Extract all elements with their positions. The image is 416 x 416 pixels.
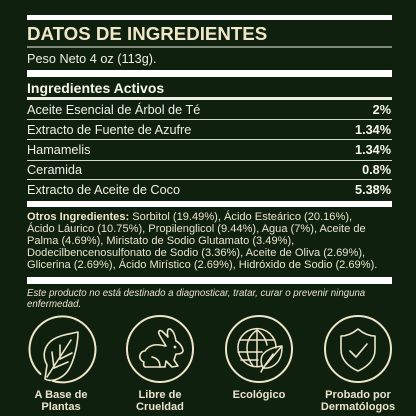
disclaimer: enfermedad. — [27, 299, 81, 310]
label: eco-friendly: Ecológico — [233, 389, 285, 401]
label: cruelty-free — [136, 389, 184, 413]
heading: active ingredients: Ingredientes Activos — [27, 80, 164, 96]
other ingredients — [27, 210, 377, 271]
row: tea tree oil — [27, 102, 391, 117]
label: cruelty-free: Libre de — [139, 389, 181, 401]
label: dermatologist tested: Dermatólogos — [321, 401, 395, 413]
icon: cruelty-free rabbit — [127, 316, 193, 382]
row: coconut oil: Extracto de Aceite de Coco — [27, 183, 180, 197]
label: plant-based: A Base de — [34, 389, 88, 401]
row: coconut oil: 5.38% — [355, 183, 391, 197]
label: plant-based — [34, 389, 88, 413]
other ingredients: Palma (4.69%), Miristato de Sodio Glutamato (3.49%), — [27, 235, 294, 247]
row: ceramide — [27, 163, 391, 177]
other ingredients: Otros Ingredientes: Sorbitol (19.49%), Ácido Esteárico (20.16%), — [27, 211, 352, 223]
row: ceramide: Ceramida — [27, 163, 82, 177]
row: tea tree oil: Aceite Esencial de Árbol de Té — [27, 103, 200, 117]
other ingredients: Dodecilbencenosulfonato de Sodio (3.36%), Aceite de Oliva (2.69%), — [27, 247, 365, 259]
disclaimer — [27, 288, 365, 310]
row: ceramide: 0.8% — [362, 163, 391, 177]
other ingredients: Glicerina (2.69%), Ácido Mirístico (2.69%), Hidróxido de Sodio (2.69%). — [27, 259, 377, 271]
label: dermatologist tested — [321, 389, 395, 413]
net weight: Peso Neto 4 oz (113g). — [27, 52, 157, 66]
row: witch hazel: Hamamelis — [27, 143, 90, 157]
row: tea tree oil: 2% — [373, 103, 391, 117]
icon: eco globe with leaf — [226, 316, 292, 382]
table: active ingredients — [27, 102, 392, 197]
disclaimer: Este producto no está destinado a diagnosticar, tratar, curar o prevenir ninguna — [27, 288, 365, 299]
row: coconut oil — [27, 183, 391, 197]
row: witch hazel: 1.34% — [355, 143, 391, 157]
other ingredients: Ácido Láurico (10.75%), Propilenglicol (9.44%), Agua (7%), Aceite de — [27, 223, 366, 235]
row: sulfur — [27, 123, 391, 137]
icon: plant-based leaf — [29, 316, 95, 382]
label: dermatologist tested: Probado por — [325, 389, 391, 401]
row: witch hazel — [27, 143, 391, 157]
icon: dermatologist tested shield — [325, 316, 391, 382]
row: sulfur: 1.34% — [355, 123, 391, 137]
label: cruelty-free: Crueldad — [136, 401, 184, 413]
label: plant-based: Plantas — [41, 401, 81, 413]
row: sulfur: Extracto de Fuente de Azufre — [27, 123, 191, 137]
title: DATOS DE INGREDIENTES — [27, 23, 267, 44]
